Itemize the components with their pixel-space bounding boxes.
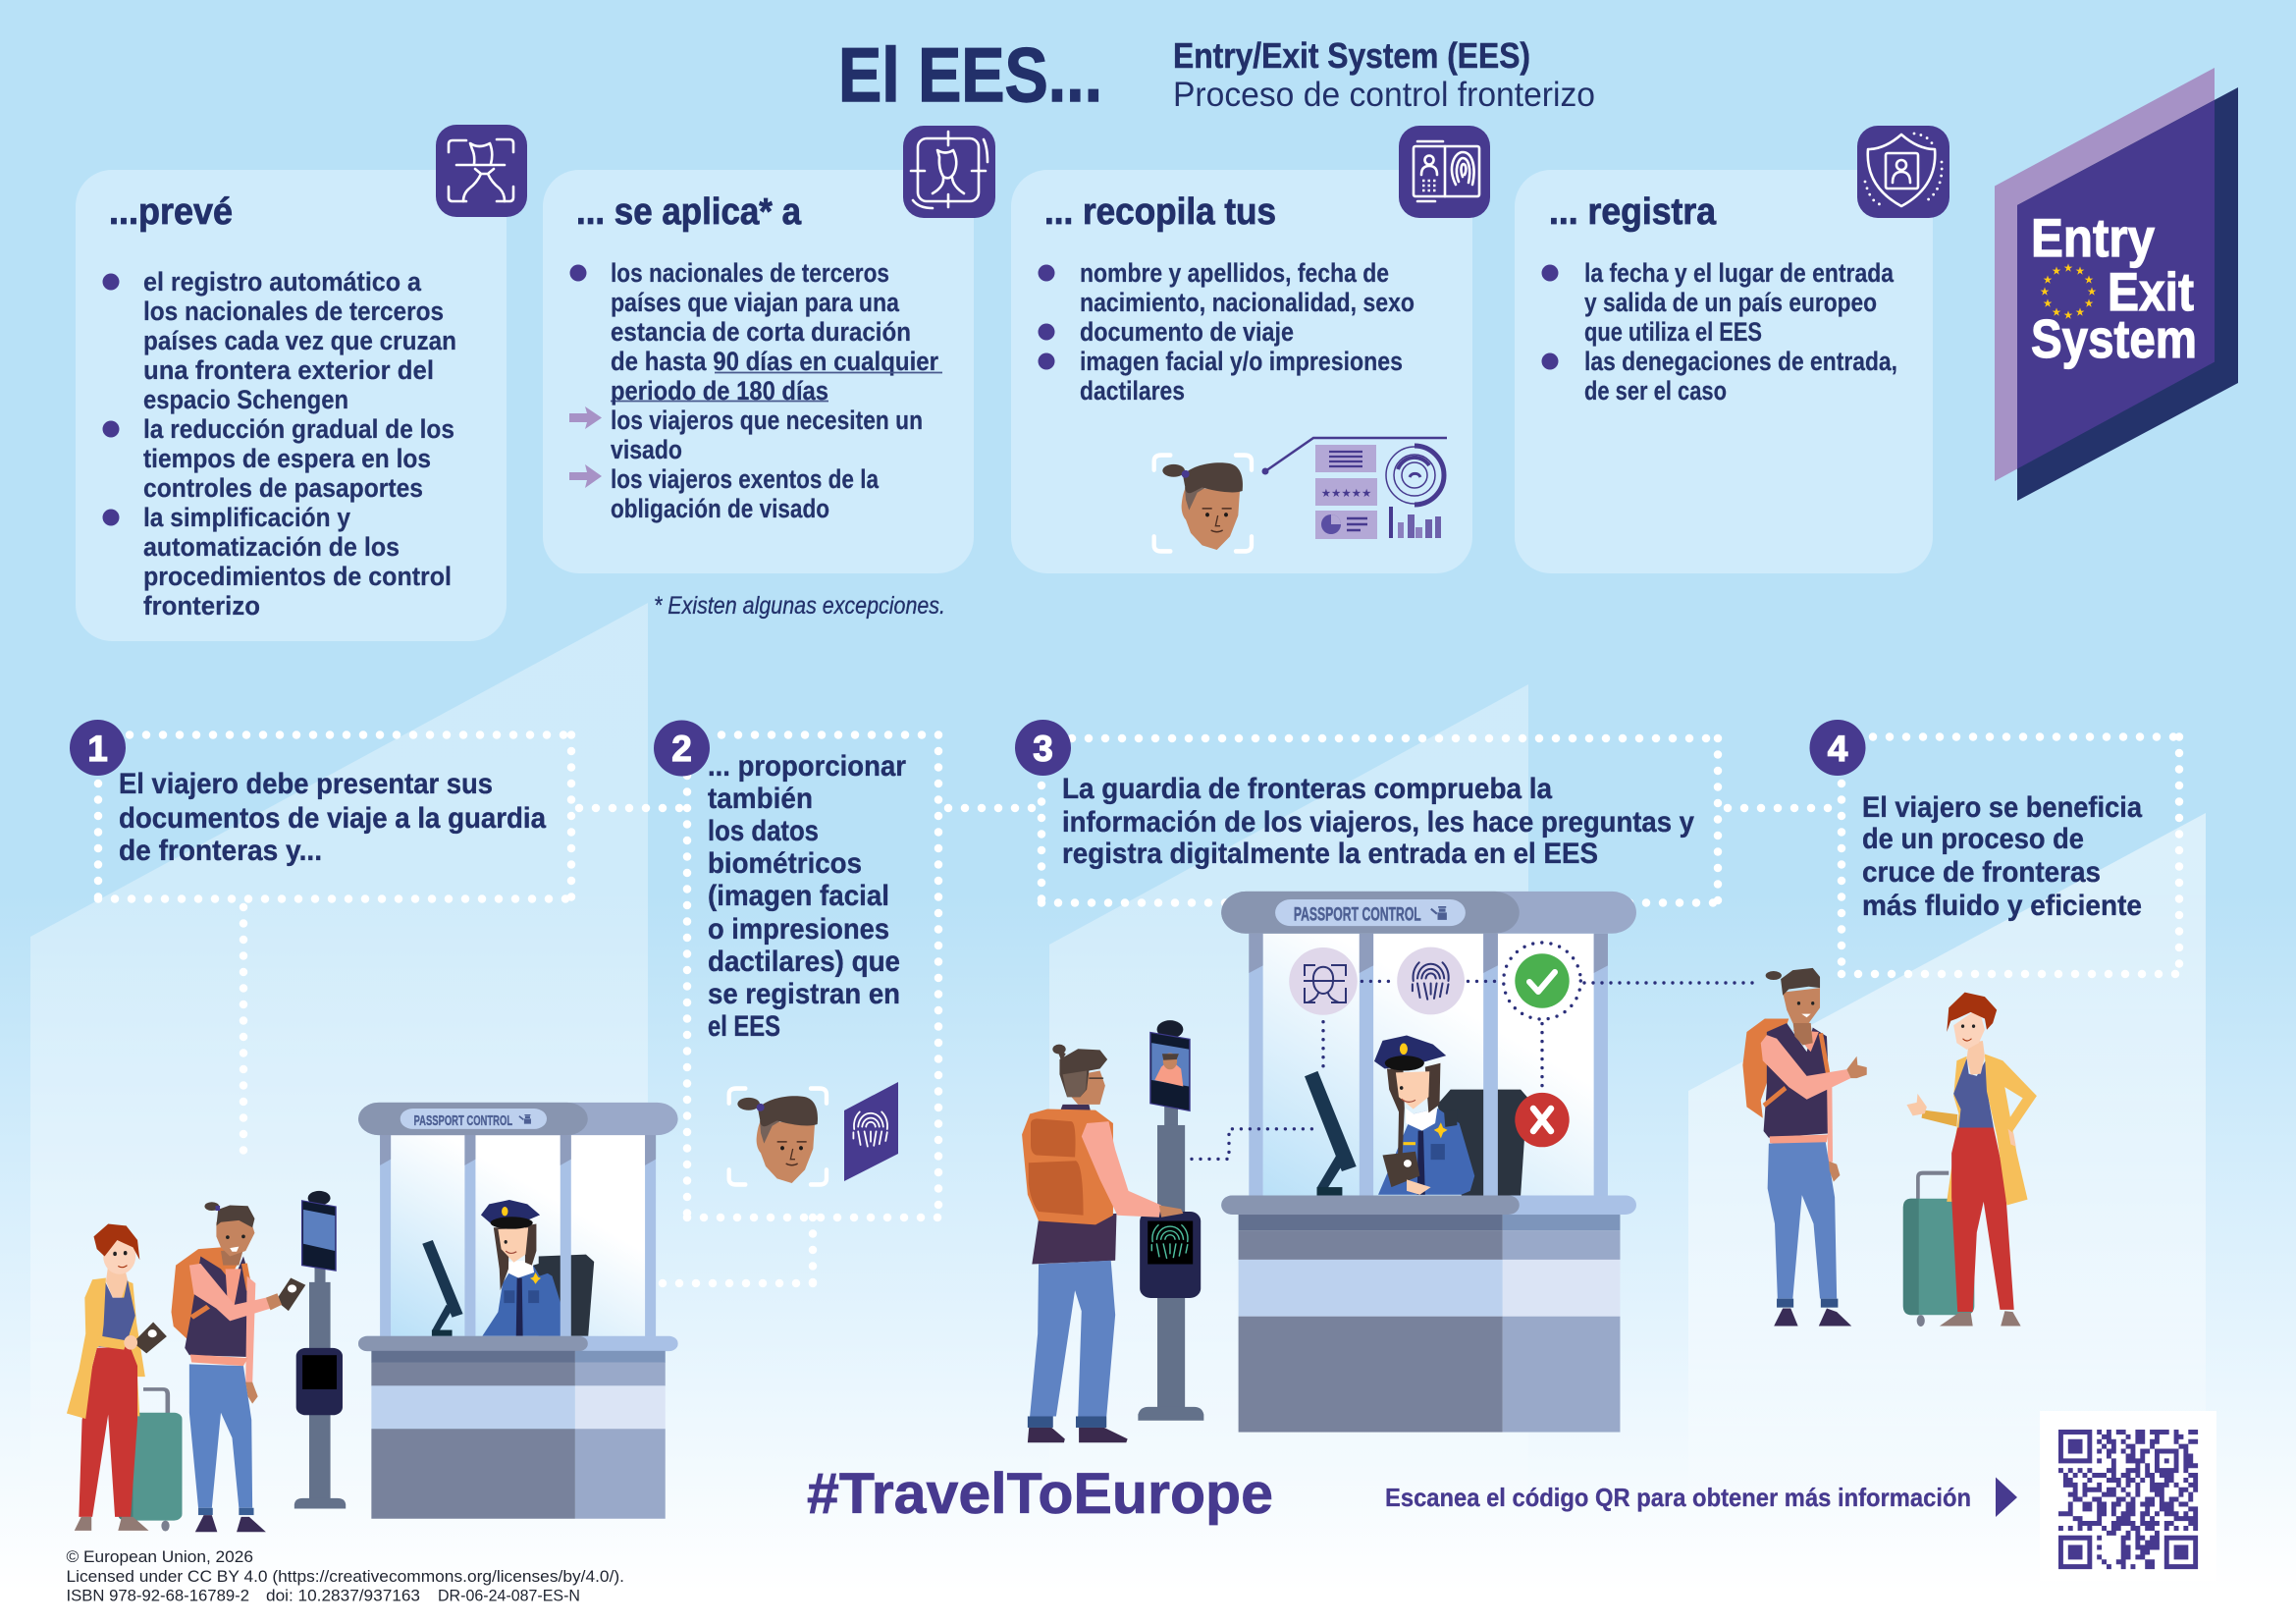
list: se aplica: los viajeros exentos de la [611,464,880,494]
list: prevé: controles de pasaportes [143,473,423,503]
list: prevé: la reducción gradual de los [143,414,454,444]
subtitle [1173,35,1595,114]
heading: se aplica: ... se aplica* a [576,191,802,233]
step 1 dotted frame [98,734,687,1155]
illustration: kiosk large [1138,1020,1203,1421]
step 4 badge [1810,720,1865,776]
illustration: travellers in queue [67,1202,305,1532]
step 2 illustration: fingerprint card [844,1082,898,1181]
list: prevé [102,267,456,621]
list: registra: la fecha y el lugar de entrada [1584,258,1895,288]
list: registra: las denegaciones de entrada, [1584,347,1897,376]
step 1 badge [70,720,126,776]
list: prevé: una frontera exterior del [143,355,434,385]
step 4 text: El viajero se beneficia [1862,791,2142,824]
list: recopila tus: imagen facial y/o impresiones [1080,347,1403,376]
step 2 text: biométricos [708,847,862,880]
step 2 text: (imagen facial [708,880,889,912]
step 4 dotted frame [1842,736,2179,974]
list: prevé: la simplificación y [143,503,350,532]
list: se aplica: estancia de corta duración [611,317,911,347]
copyright footer: Licensed under CC BY 4.0 (https://creativecommons.org/licenses/by/4.0/). [67,1567,624,1586]
illustration: passport booth large: PASSPORT CONTROL [1294,904,1421,925]
illustration: traveller face [1154,456,1252,551]
copyright footer: doi: 10.2837/937163 [266,1587,420,1604]
step 4 text [1862,791,2142,922]
illustration: biometric data [1262,438,1447,539]
logo: Entry Exit System: Entry [2031,207,2155,268]
list: prevé: el registro automático a [143,267,422,297]
list: se aplica: visado [611,435,682,464]
list: se aplica: los nacionales de terceros [611,258,889,288]
list: se aplica: de hasta 90 días en cualquier [611,347,938,376]
step 4 badge: 4 [1828,729,1848,769]
step 1 badge: 1 [87,729,108,769]
icon: face recognition circle [1289,947,1358,1015]
icon: rejected cross [1515,1093,1570,1147]
step 2 badge [654,721,710,776]
icon: face in frame [903,126,995,218]
illustration: passport booth large [1221,892,1636,1433]
panel: recopila tus [1011,170,1472,573]
copyright footer: © European Union, 2026 [67,1547,253,1566]
illustration: passport booth small [358,1103,678,1519]
figure: man talking [1742,968,1867,1326]
step 2 text [708,750,906,1043]
figure: woman with suitcase [67,1224,183,1532]
figure: man at kiosk [1022,1045,1183,1442]
list: registra: y salida de un país europeo [1584,288,1877,317]
step 3 text: La guardia de fronteras comprueba la [1062,773,1552,805]
list: recopila tus: nombre y apellidos, fecha de [1080,258,1389,288]
step 1 text: El viajero debe presentar sus [119,768,493,800]
step 2 text: también [708,783,813,815]
copyright footer [67,1547,624,1604]
list: prevé: fronterizo [143,591,260,621]
step 2 dotted frame [660,734,1041,1283]
figure: man with passport [171,1202,305,1532]
QR prompt: Escanea el código QR para obtener más información [1385,1483,1971,1512]
list: prevé: países cada vez que cruzan [143,326,456,355]
icon: passport and fingerprint [1399,126,1490,218]
subtitle: Entry/Exit System (EES) [1173,35,1530,76]
step 2 text: se registran en [708,978,900,1010]
step 1 text: documentos de viaje a la guardia [119,802,546,835]
list: se aplica: los viajeros que necesiten un [611,406,923,435]
step 2 illustration: face [729,1089,827,1184]
copyright footer: ISBN 978-92-68-16789-2 [67,1587,249,1604]
list: registra: de ser el caso [1584,376,1727,406]
illustration: kiosk small [294,1191,346,1508]
step 2 text: el EES [708,1010,780,1043]
heading: prevé: ...prevé [109,191,233,233]
list: se aplica: periodo de 180 días [611,376,828,406]
panel: prevé [76,170,507,641]
list: prevé: automatización de los [143,532,400,562]
step 3 badge: 3 [1033,729,1053,769]
figure: woman with suitcase talking [1903,993,2037,1326]
list: registra: que utiliza el EES [1584,317,1762,347]
step 2 text: ... proporcionar [708,750,906,783]
step 2 text: los datos [708,815,819,847]
copyright footer: DR-06-24-087-ES-N [438,1587,580,1604]
step 3 text: registra digitalmente la entrada en el EES [1062,838,1598,870]
logo: Entry Exit System: System [2031,308,2197,369]
step 1 text [119,768,546,867]
list: recopila tus: documento de viaje [1080,317,1294,347]
icon: approved check [1504,943,1580,1019]
list: se aplica: países que viajan para una [611,288,900,317]
list: prevé: procedimientos de control [143,562,452,591]
step 2 text: o impresiones [708,913,889,946]
QR code [2040,1411,2216,1581]
list: recopila tus: nacimiento, nacionalidad, sexo [1080,288,1415,317]
dotted data links [1192,981,1761,1159]
list: prevé: tiempos de espera en los [143,444,431,473]
logo: Entry Exit System: Exit [2108,261,2194,322]
step 4 text: cruce de fronteras [1862,856,2101,889]
icon: shield [1857,126,1949,218]
hashtag: #TravelToEurope [807,1462,1273,1526]
illustration: biometric data: ★★★★★ [1321,486,1371,500]
logo: Entry Exit System [1995,68,2238,501]
footnote: * Existen algunas excepciones. [654,592,945,620]
heading: recopila tus: ... recopila tus [1044,191,1276,233]
list: se aplica [569,258,942,523]
list: recopila tus: dactilares [1080,376,1185,406]
arrow to QR [1996,1477,2017,1517]
step 3 text: información de los viajeros, les hace preguntas y [1062,806,1694,839]
list: prevé: espacio Schengen [143,385,348,414]
list: prevé: los nacionales de terceros [143,297,444,326]
step 1 text: de fronteras y... [119,835,322,867]
step 2 text: dactilares) que [708,946,900,978]
step 3 text [1062,773,1694,870]
title: El EES... [838,31,1102,118]
step 3 dotted frame [1041,738,1842,903]
panel: se aplica [543,170,974,573]
list: registra [1541,258,1897,406]
icon: face scan [436,125,527,217]
illustration: passport booth small: PASSPORT CONTROL [414,1112,512,1128]
step 3 badge [1015,720,1071,776]
step 4 text: más fluido y eficiente [1862,890,2142,922]
subtitle: Proceso de control fronterizo [1173,76,1595,114]
list: se aplica: obligación de visado [611,494,829,523]
icon: fingerprint circle [1397,947,1465,1014]
step 2 badge: 2 [671,729,692,769]
panel: registra [1515,170,1933,573]
step 4 text: de un proceso de [1862,823,2084,855]
list: recopila tus [1039,258,1415,406]
heading: registra: ... registra [1549,191,1717,233]
